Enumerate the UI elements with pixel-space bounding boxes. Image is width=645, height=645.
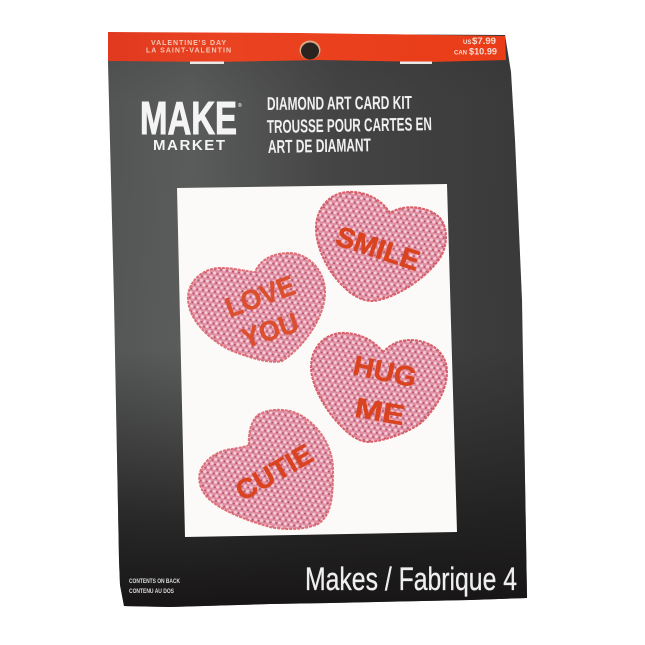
heart: love you (188, 253, 325, 362)
heart: hug me (311, 333, 447, 442)
white tabs (190, 62, 432, 64)
brand logo: ® (238, 102, 242, 109)
contents note (129, 578, 180, 595)
heart: smile: SMILE (332, 220, 424, 277)
header text: price: CAN (454, 50, 467, 56)
contents note: CONTENU AU DOS (129, 588, 174, 595)
brand logo: MARKET (153, 137, 225, 154)
product title (267, 92, 432, 157)
quantity label: Makes / Fabrique 4 (305, 561, 517, 597)
heart: hug me: HUG (350, 350, 419, 393)
product title: TROUSSE POUR CARTES EN (267, 113, 432, 137)
product title: ART DE DIAMANT (268, 134, 372, 157)
heart: love you: YOU (238, 307, 303, 354)
header text: price: US (463, 40, 471, 46)
hang hole (300, 40, 320, 60)
brand logo (140, 92, 242, 154)
heart: cutie (199, 410, 333, 529)
header text: occasion (146, 40, 231, 54)
heart: love you: LOVE (221, 270, 299, 323)
heart: smile (316, 192, 446, 301)
red header band (108, 32, 506, 62)
brand logo: MAKE (140, 92, 237, 144)
header text: occasion: VALENTINE'S DAY (151, 40, 226, 47)
header text: price: $10.99 (469, 46, 497, 58)
heart: hug me: ME (353, 392, 407, 431)
product title: DIAMOND ART CARD KIT (267, 92, 412, 114)
header text: price: $7.99 (472, 36, 496, 47)
contents note: CONTENTS ON BACK (129, 578, 180, 585)
heart: cutie: CUTIE (230, 438, 318, 507)
card background (108, 33, 527, 607)
header text: price (454, 36, 497, 58)
white artwork panel (177, 184, 457, 537)
header text: occasion: LA SAINT-VALENTIN (146, 48, 231, 54)
